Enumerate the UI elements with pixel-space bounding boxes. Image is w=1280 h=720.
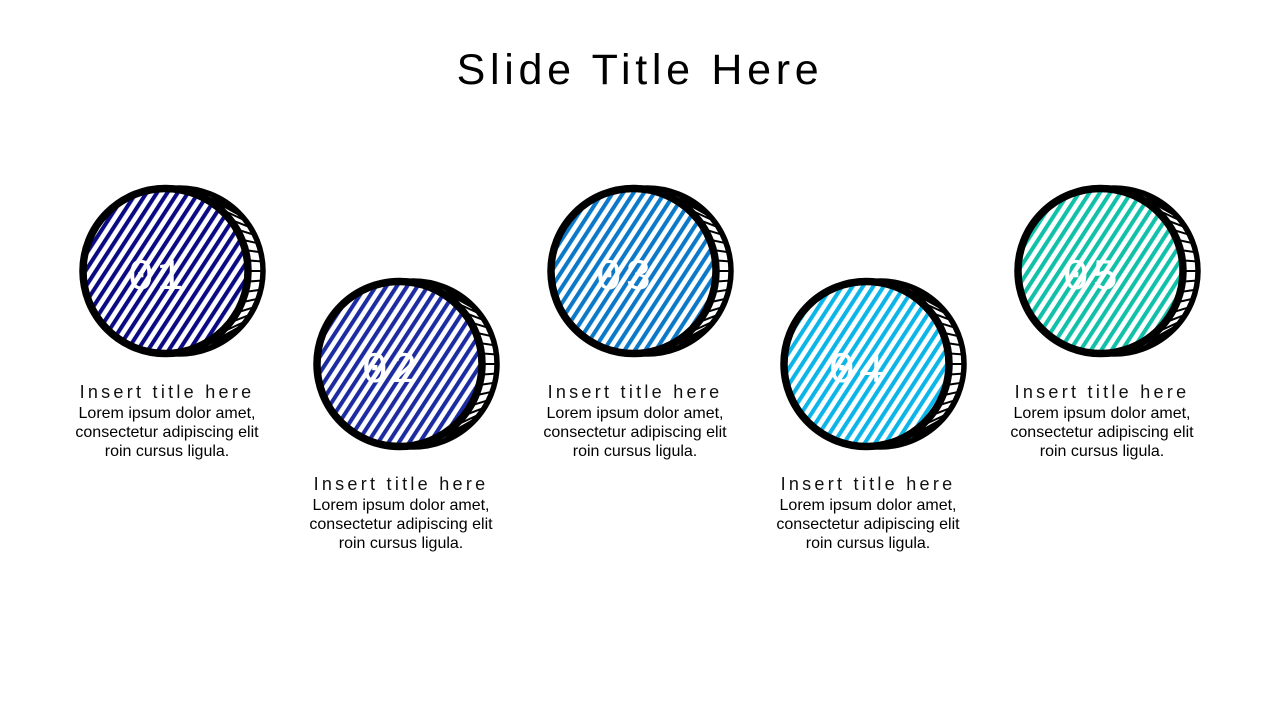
coin 02 <box>317 277 506 451</box>
coin 04: 04 <box>829 346 887 396</box>
text block 02: consectetur adipiscing elit <box>309 516 493 533</box>
coin graphics <box>79 184 1201 450</box>
text block 05 <box>1010 382 1194 460</box>
text block 03: Insert title here <box>548 382 722 402</box>
text block 04: roin cursus ligula. <box>806 535 930 552</box>
coin 01: 01 <box>128 253 186 303</box>
text block 01: consectetur adipiscing elit <box>75 424 259 441</box>
coin 04 <box>784 277 973 451</box>
title: Slide Title Here <box>457 46 823 94</box>
text block 02: Lorem ipsum dolor amet, <box>313 497 489 514</box>
coin 01 <box>83 184 272 358</box>
text block 01: Lorem ipsum dolor amet, <box>79 405 255 422</box>
coin 05: 05 <box>1063 253 1121 303</box>
text block 03: roin cursus ligula. <box>573 443 697 460</box>
text block 01: roin cursus ligula. <box>105 443 229 460</box>
coin 05 <box>1018 184 1207 358</box>
coin 02: 02 <box>362 346 420 396</box>
text block 03: consectetur adipiscing elit <box>543 424 727 441</box>
text block 04 <box>776 474 960 552</box>
text block 03: Lorem ipsum dolor amet, <box>547 405 723 422</box>
text block 02 <box>309 474 493 552</box>
coin 03 <box>551 184 740 358</box>
coin 03: 03 <box>596 253 654 303</box>
text block 02: roin cursus ligula. <box>339 535 463 552</box>
text block 02: Insert title here <box>314 474 488 494</box>
text block 03 <box>543 382 727 460</box>
text block 04: Lorem ipsum dolor amet, <box>780 497 956 514</box>
text block 05: Lorem ipsum dolor amet, <box>1014 405 1190 422</box>
text block 05: Insert title here <box>1015 382 1189 402</box>
text block 05: consectetur adipiscing elit <box>1010 424 1194 441</box>
text block 05: roin cursus ligula. <box>1040 443 1164 460</box>
text block 04: consectetur adipiscing elit <box>776 516 960 533</box>
text block 01 <box>75 382 259 460</box>
text block 04: Insert title here <box>781 474 955 494</box>
text block 01: Insert title here <box>80 382 254 402</box>
